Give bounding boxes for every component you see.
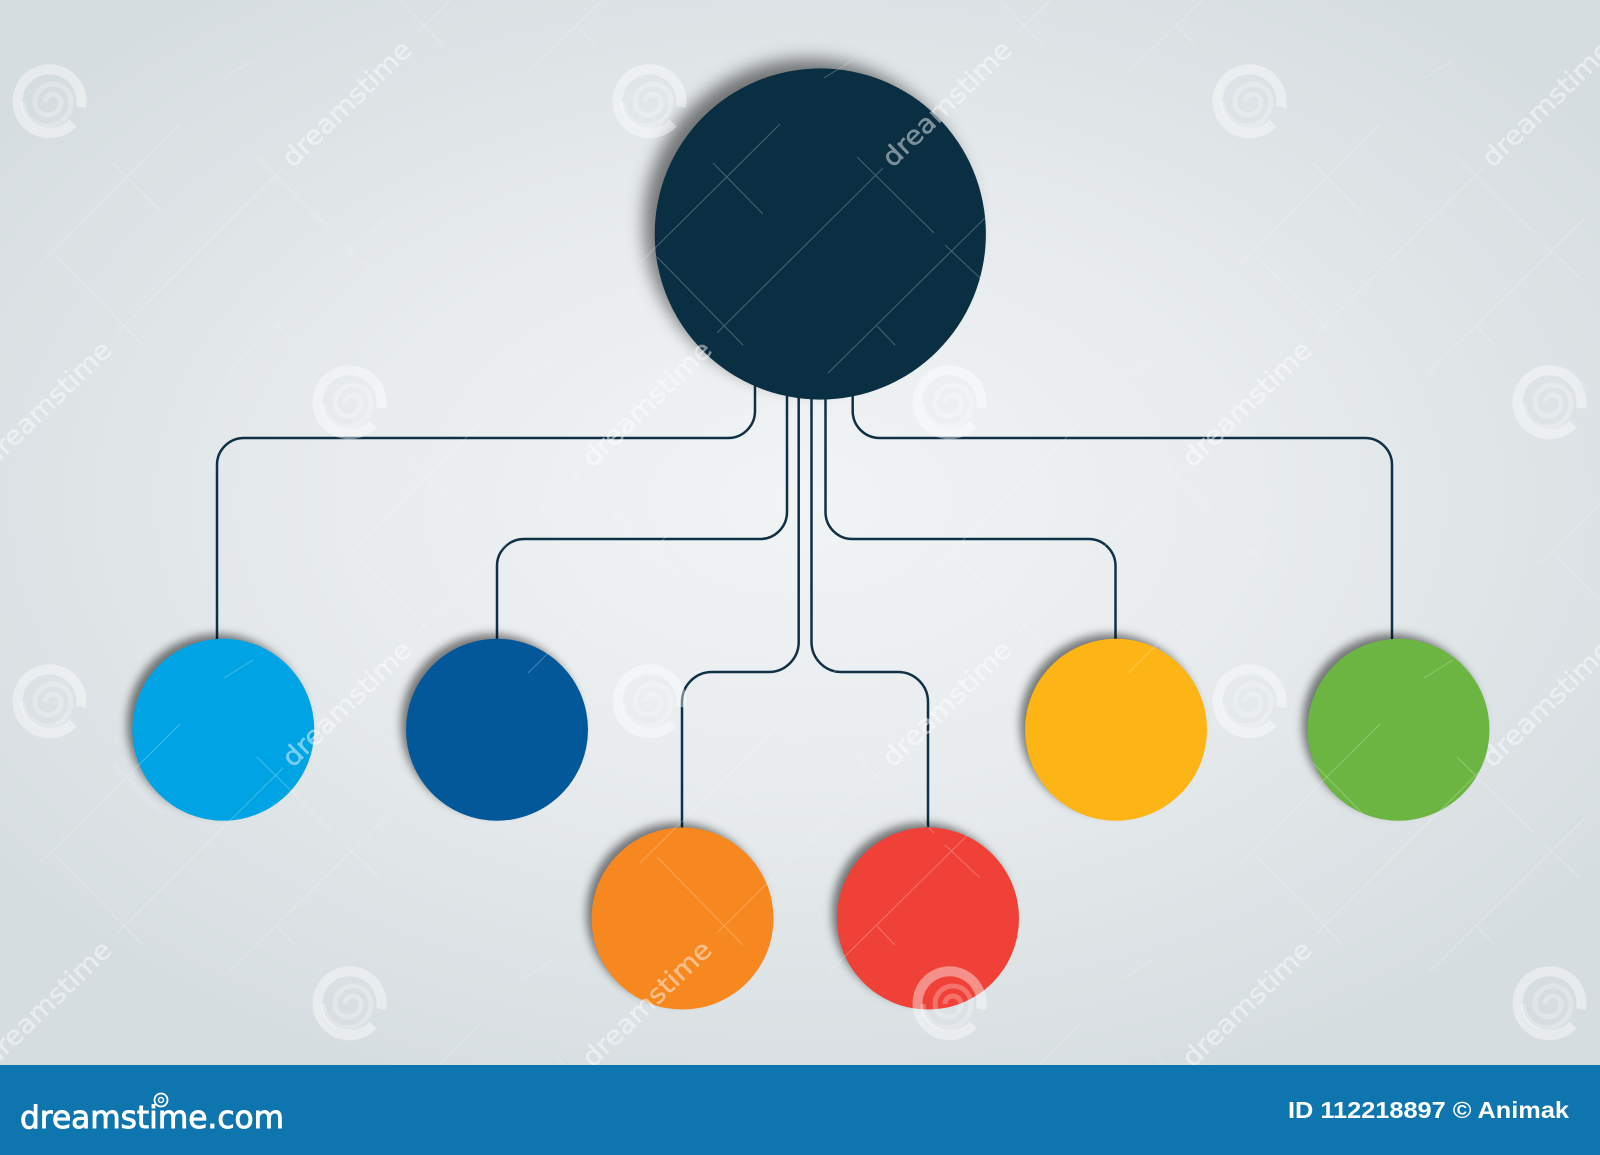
watermark overlay: dreamstime (277, 635, 418, 773)
node: red (832, 823, 1019, 1010)
node: light blue (127, 634, 314, 821)
connector: yellow node (826, 385, 1116, 645)
connector: green node (853, 385, 1392, 645)
connector: red node (812, 385, 928, 835)
connector: navy node (497, 385, 787, 645)
connector: light blue node (217, 385, 755, 645)
main circle (644, 59, 986, 400)
watermark overlay: dreamstime (1177, 335, 1318, 473)
node: navy (401, 634, 588, 821)
node: yellow (1020, 634, 1207, 821)
watermark overlay: dreamstime (877, 35, 1018, 173)
watermark overlay: dreamstime (1177, 935, 1318, 1073)
node: orange (586, 823, 774, 1010)
connector lines (217, 385, 1392, 835)
connector: orange node (682, 385, 799, 835)
footer logo: dreamstime.com (20, 1100, 284, 1136)
footer image id and credit: ID 112218897 © Animak (1288, 1097, 1569, 1123)
watermark overlay: dreamstime (577, 935, 718, 1073)
watermark overlay: dreamstime (577, 335, 718, 473)
footer bar (0, 1065, 1600, 1155)
node: green (1302, 634, 1490, 821)
watermark overlay: dreamstime (877, 635, 1018, 773)
watermark overlay: dreamstime (277, 35, 418, 173)
